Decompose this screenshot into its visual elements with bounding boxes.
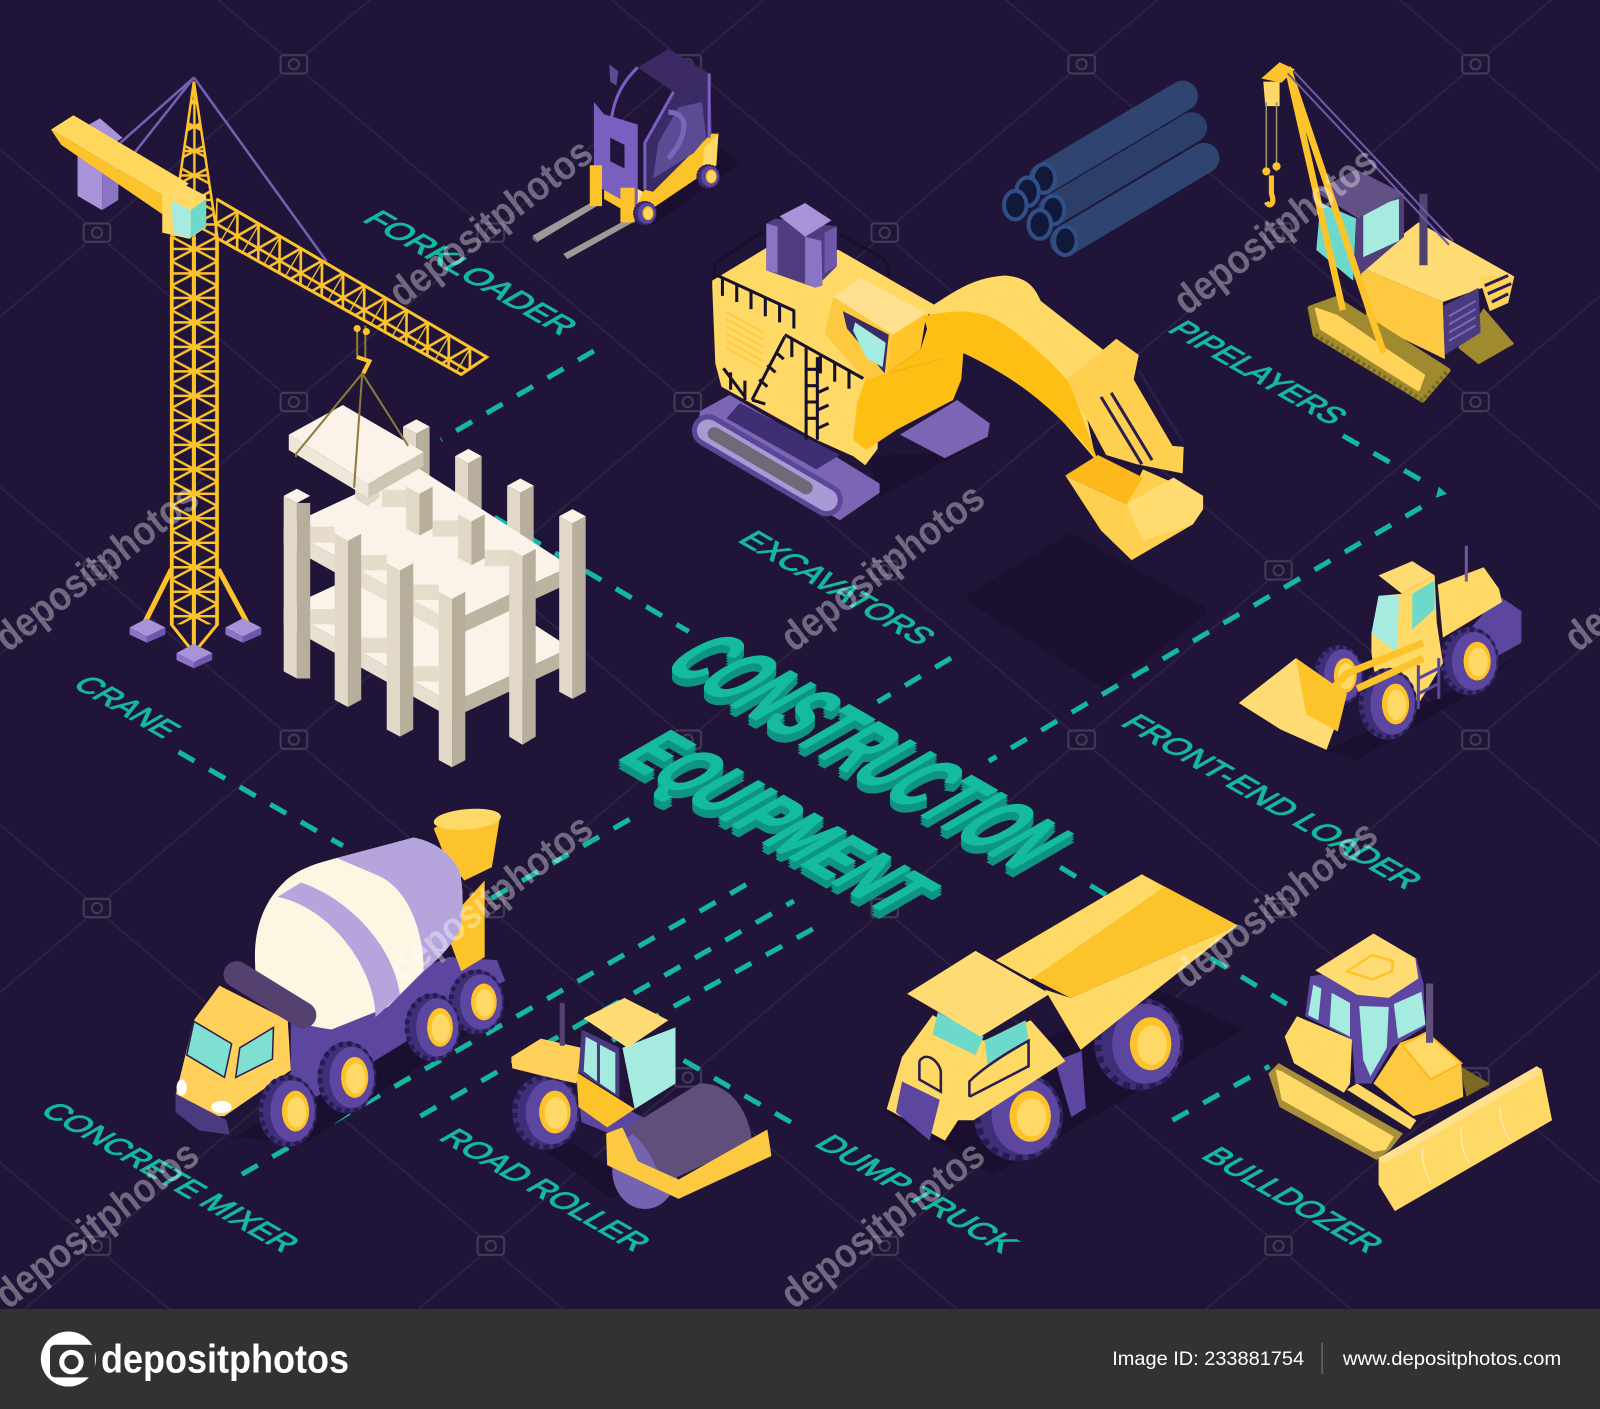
loader ladder bbox=[1418, 658, 1439, 709]
forklift mast bbox=[590, 102, 638, 222]
dashed connectors bbox=[179, 351, 1433, 1174]
bucket bbox=[1065, 455, 1203, 560]
loader wheels bbox=[1314, 645, 1363, 706]
bulldozer bbox=[1268, 934, 1552, 1211]
repeating watermarks: depositphotos bbox=[379, 129, 601, 315]
rear wheel bbox=[1094, 997, 1183, 1090]
loader arms bbox=[1318, 643, 1423, 704]
hook block bbox=[354, 325, 370, 373]
mixer visor bbox=[237, 974, 303, 1015]
label: crane: CRANE bbox=[65, 671, 189, 742]
road roller bbox=[511, 998, 771, 1209]
mixer rear support bbox=[444, 880, 485, 971]
mixer shadow bbox=[235, 979, 510, 1143]
bulldozer exhaust bbox=[1426, 984, 1433, 1043]
loader bucket bbox=[1239, 658, 1347, 750]
pipelayer bbox=[1261, 62, 1514, 400]
excavator machinery house bbox=[766, 203, 837, 288]
crane bbox=[51, 78, 487, 668]
title word: equipment: EQUIPMENT bbox=[600, 728, 957, 934]
pipelayer hood bbox=[1360, 222, 1514, 359]
crane boom lattice bbox=[214, 199, 487, 374]
mixer chassis bbox=[291, 957, 505, 1097]
title word: construction: CONSTRUCTION bbox=[642, 620, 1094, 881]
pipe 6 bbox=[1029, 210, 1051, 239]
mixer drum bbox=[255, 838, 463, 1029]
dump body bbox=[996, 874, 1238, 1050]
title word: construction: CONSTRUCTION bbox=[642, 625, 1094, 886]
lower floor slab bbox=[284, 548, 570, 718]
near track bbox=[697, 395, 880, 520]
upper floor slab bbox=[284, 466, 570, 638]
roller cab bbox=[577, 998, 676, 1127]
bulldozer cab bbox=[1305, 934, 1426, 1084]
boom bbox=[923, 275, 1106, 461]
far track bbox=[1458, 308, 1514, 364]
pipelayer cab bbox=[1315, 169, 1404, 281]
counterweight bbox=[78, 118, 122, 210]
pipelayer hook bbox=[1262, 102, 1281, 205]
roller exhaust bbox=[560, 1003, 565, 1046]
title word: equipment bbox=[593, 720, 964, 934]
footer url: www.depositphotos.com bbox=[1342, 1348, 1561, 1370]
forklift cab bbox=[609, 49, 712, 192]
forklift wheels bbox=[633, 201, 657, 225]
repeating watermarks: depositphotos bbox=[1164, 137, 1386, 323]
connector arrow tip bbox=[1436, 487, 1447, 498]
title: construction equipment bbox=[593, 620, 1101, 934]
truck canopy bbox=[907, 951, 1050, 1037]
forklift body bbox=[604, 134, 718, 218]
repeating watermarks: depositphotos bbox=[379, 804, 601, 991]
front-end loader bbox=[1239, 546, 1521, 760]
label: bulldozer: BULLDOZER bbox=[1194, 1142, 1393, 1257]
roller hood bbox=[511, 1039, 582, 1084]
outer columns bbox=[284, 489, 586, 767]
bulldozer body bbox=[1285, 1016, 1352, 1093]
repeating watermarks: depositphotos bbox=[771, 1131, 993, 1317]
far track bbox=[900, 400, 990, 458]
loader cab bbox=[1371, 561, 1443, 704]
image id: Image ID: 233881754 bbox=[1112, 1348, 1304, 1370]
crane stay cables bbox=[120, 78, 327, 261]
roller yoke bbox=[606, 1127, 771, 1199]
lifting slings bbox=[296, 373, 408, 488]
lifted slab bbox=[289, 405, 423, 506]
footer divider bbox=[1321, 1343, 1323, 1374]
truck cab bbox=[887, 1012, 1065, 1141]
footer logo text: depositphotos bbox=[101, 1337, 349, 1381]
label: excavators: EXCAVATORS bbox=[731, 526, 945, 649]
pipe 4 bbox=[1054, 158, 1204, 255]
roller drum bbox=[612, 1083, 752, 1209]
pipelayer exhaust bbox=[1419, 194, 1427, 265]
label: pipelayers: PIPELAYERS bbox=[1160, 316, 1357, 429]
forklift shadow bbox=[633, 143, 740, 224]
mixer front wheel bbox=[259, 1075, 317, 1147]
crane footing blocks bbox=[130, 618, 261, 668]
title word: equipment: EQUIPMENT bbox=[600, 722, 957, 928]
mixer cab bbox=[176, 986, 291, 1135]
label: concrete mixer: CONCRETE MIXER bbox=[33, 1097, 309, 1256]
excavator railing bbox=[713, 232, 889, 440]
label: road roller: ROAD ROLLER bbox=[432, 1124, 660, 1255]
title word: equipment: EQUIPMENT bbox=[600, 725, 957, 931]
truck frame bbox=[1055, 1051, 1086, 1117]
pipe 1 bbox=[1033, 96, 1183, 193]
bulldozer near track bbox=[1268, 1063, 1403, 1160]
title word: construction: CONSTRUCTION bbox=[642, 628, 1094, 889]
stacked pipes bbox=[1004, 96, 1204, 255]
label: forkloader: FORKLOADER bbox=[355, 205, 587, 339]
mixer wheels bbox=[449, 970, 504, 1034]
stick bbox=[1067, 339, 1184, 473]
concrete mixer truck bbox=[176, 806, 510, 1147]
bulldozer walkway bbox=[1347, 1084, 1416, 1129]
excavator body bbox=[712, 248, 971, 465]
excavator shadow bbox=[869, 437, 990, 497]
loader rear body bbox=[1438, 546, 1521, 665]
excavator ground shadow bbox=[973, 540, 1200, 683]
bulldozer blade bbox=[1379, 1066, 1552, 1211]
crane mast bbox=[171, 82, 217, 663]
pipelayer boom bbox=[1261, 62, 1384, 353]
pipe 5 bbox=[1004, 191, 1027, 219]
concrete building frame bbox=[284, 373, 586, 767]
crane cab bbox=[162, 183, 206, 239]
excavator bbox=[697, 203, 1203, 560]
footer bar bbox=[0, 1309, 1600, 1409]
title word: equipment: EQUIPMENT bbox=[600, 720, 957, 926]
back columns bbox=[403, 419, 534, 549]
counter jib bbox=[51, 115, 189, 216]
loader shadow bbox=[1327, 653, 1520, 760]
near track bbox=[1310, 299, 1448, 400]
forks bbox=[533, 201, 635, 259]
forklift bbox=[533, 49, 740, 259]
bulldozer engine bbox=[1373, 1033, 1463, 1116]
label: front-end loader: FRONT-END LOADER bbox=[1113, 709, 1432, 893]
roller rear wheel bbox=[512, 1075, 580, 1150]
crane legs bbox=[145, 569, 247, 622]
roller frame bbox=[577, 1084, 653, 1143]
repeating watermarks: depositphotos bbox=[771, 474, 993, 660]
label: dump truck: DUMP TRUCK bbox=[807, 1130, 1028, 1257]
dump truck bbox=[882, 874, 1244, 1174]
pipelayer cables bbox=[1288, 71, 1453, 245]
roller shadow bbox=[541, 1143, 633, 1199]
pipe 2 bbox=[1042, 128, 1192, 224]
front wheel bbox=[974, 1072, 1063, 1161]
dump truck shadow bbox=[882, 990, 1244, 1174]
footer logo icon bbox=[41, 1331, 96, 1387]
excavator louvers bbox=[727, 312, 763, 367]
title word: construction bbox=[635, 620, 1101, 889]
pipe 3 bbox=[1016, 178, 1039, 206]
repeating watermarks: depositphotos bbox=[1164, 810, 1386, 997]
bulldozer rear track bbox=[1460, 1066, 1490, 1097]
hopper bbox=[433, 806, 502, 880]
inner columns bbox=[406, 480, 485, 565]
title word: construction: CONSTRUCTION bbox=[642, 623, 1094, 884]
